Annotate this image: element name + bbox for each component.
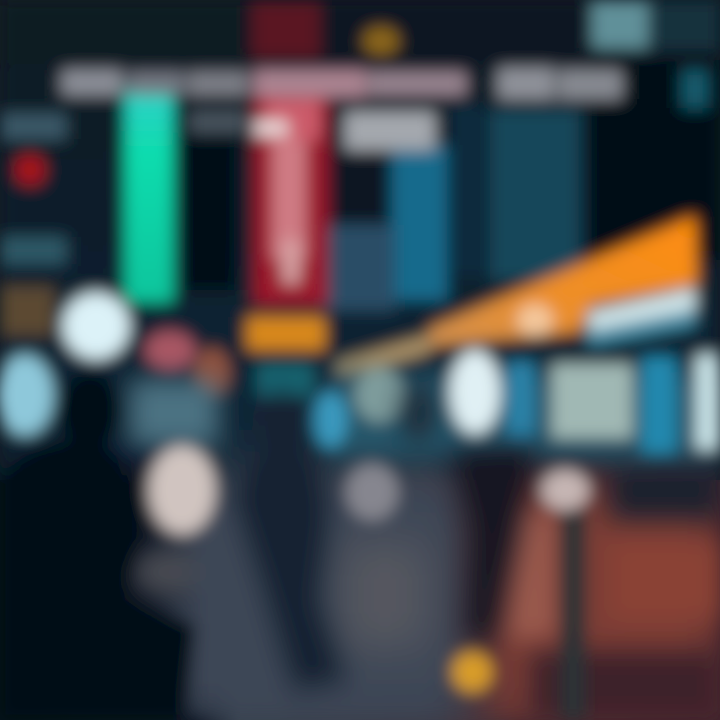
yellow ground light — [452, 652, 492, 692]
small amber sign — [247, 317, 325, 350]
middle pink and white shop lights — [130, 331, 589, 594]
blue vertical sign — [325, 145, 447, 310]
green vertical sign — [125, 88, 173, 302]
left side signs — [0, 114, 129, 435]
top right teal building — [592, 0, 720, 108]
teal building facade — [450, 105, 580, 280]
background: pavement — [0, 465, 720, 720]
background: upper street buildings — [0, 0, 720, 480]
red vertical sign — [254, 95, 328, 305]
blurred heading band — [62, 68, 622, 150]
storefront light row — [313, 350, 720, 457]
silhouette: centre person — [235, 394, 345, 690]
orange storefront sign — [335, 216, 697, 380]
silhouette: right person — [400, 382, 535, 640]
silhouette: left foreground person — [0, 372, 195, 720]
top crimson sign and amber lamp — [252, 0, 399, 58]
silhouette: far right person — [560, 510, 586, 720]
